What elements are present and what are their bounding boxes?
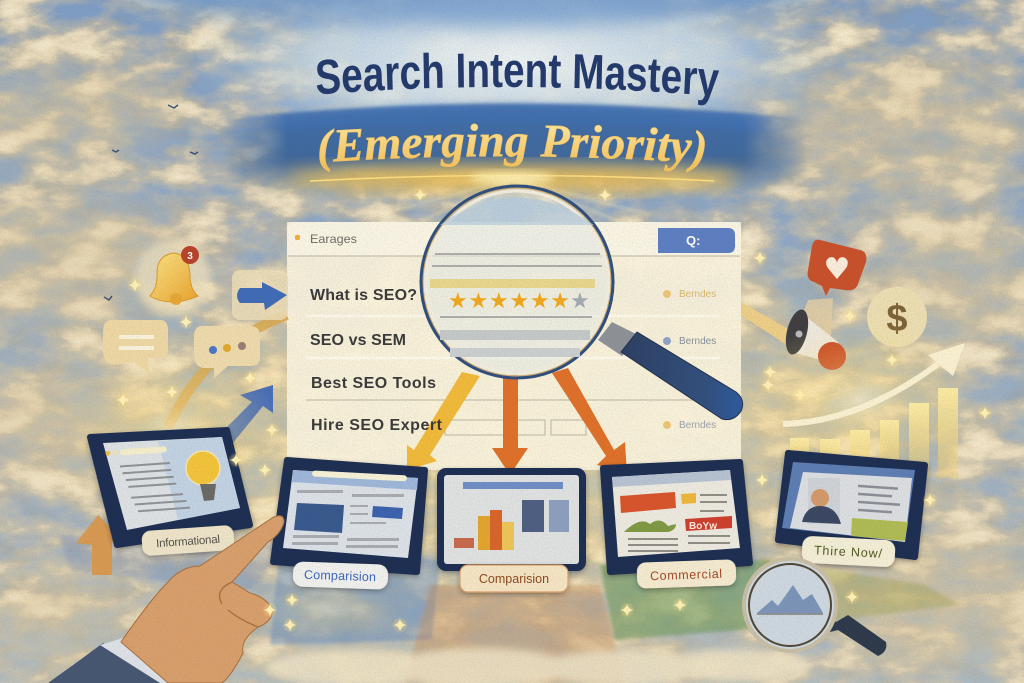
- golden glow: [15, 220, 1015, 640]
- icon: bell: 3: [187, 251, 193, 262]
- icon: dollar coin: [867, 287, 927, 347]
- sleeve: [48, 643, 170, 683]
- sparkle glow areas: [70, 320, 980, 640]
- card: comparison chart: [437, 468, 586, 592]
- search results panel: Earages: [310, 232, 357, 246]
- blue diagonal arrow: [222, 385, 273, 444]
- right row labels: [663, 289, 716, 431]
- panel rules: [288, 256, 740, 435]
- label: hire now: Thire Now/: [814, 543, 883, 561]
- orange up arrow: [76, 515, 122, 575]
- result: best seo tools: Best SEO Tools: [311, 375, 436, 392]
- sky highlight behind title: [185, 0, 845, 157]
- icon: bell: [150, 246, 199, 305]
- label: commercial: Commercial: [650, 567, 722, 583]
- icon: chat bubble: [103, 320, 168, 373]
- search results panel: [287, 222, 741, 470]
- pointing hand: [48, 516, 284, 683]
- right row labels: Berndes: [679, 336, 716, 347]
- beam to megaphone: [741, 302, 790, 345]
- finger crease: [220, 582, 258, 627]
- handle: [598, 322, 743, 420]
- icon: heart bubble: ♥: [824, 252, 850, 287]
- card: comparison chart: Comparision: [479, 572, 549, 586]
- search header bar: [287, 222, 741, 256]
- growth arrow: [783, 364, 938, 424]
- cream patch behind megaphone: [795, 298, 833, 350]
- card: informational: [90, 430, 250, 556]
- card: hire now: [778, 453, 925, 567]
- label: hire now: [801, 536, 896, 567]
- result: hire seo expert: Hire SEO Expert: [311, 417, 443, 434]
- lens lines: [430, 254, 602, 357]
- lens sky tint: [440, 198, 594, 225]
- arrow: orange right: [552, 368, 627, 473]
- hand: [121, 516, 284, 683]
- top sky strip: [120, 0, 820, 26]
- header label: [295, 235, 300, 240]
- row dividers: [306, 316, 720, 358]
- label: comparision orange: [460, 565, 568, 592]
- label: comparision blue: Comparision: [304, 568, 376, 584]
- result: seo vs sem: SEO vs SEM: [310, 332, 406, 349]
- result: what is seo: What is SEO?: [310, 287, 417, 304]
- label: comparision blue: [293, 561, 388, 590]
- search results panel: Q:: [686, 233, 700, 248]
- sparkles: [115, 187, 993, 633]
- icon: blue arrow: [237, 282, 287, 310]
- card: commercial: BoYw: [689, 521, 717, 532]
- arrow: orange centre: [492, 375, 528, 475]
- icon: dollar coin: $: [886, 298, 908, 340]
- right row labels: Berndes: [679, 420, 716, 431]
- growth chart: [783, 343, 965, 478]
- label: informational: Informational: [156, 534, 220, 550]
- arrow: yellow: [407, 372, 480, 470]
- star rating: ★★★★★★: [448, 289, 570, 314]
- icon: heart bubble: [808, 240, 866, 296]
- result rows: [310, 287, 443, 434]
- curved path arrow: [168, 315, 287, 428]
- card: comparison blue: [273, 460, 425, 590]
- horizon glow: [282, 165, 742, 191]
- label: commercial: [637, 559, 736, 589]
- cream tile behind blue arrow: [232, 270, 288, 320]
- right row labels: Berndes: [679, 289, 716, 300]
- label: informational: [141, 525, 235, 556]
- icon: megaphone: [782, 307, 846, 370]
- lens: [422, 187, 612, 377]
- magnifying glass: [421, 186, 743, 420]
- card: commercial: [603, 462, 750, 589]
- blue title arc band: [215, 104, 815, 195]
- icon: dots bubble: [194, 326, 260, 378]
- title: Search Intent Mastery: [316, 52, 720, 106]
- subtitle: (Emerging Priority): [319, 124, 705, 172]
- cream glow behind bell: [135, 240, 211, 316]
- light rays: [380, 178, 650, 222]
- small magnifier: [744, 559, 886, 656]
- magnifying glass: ★: [570, 289, 590, 314]
- search button: [658, 228, 735, 253]
- bottom cloud bank: [265, 648, 810, 683]
- birds: [104, 105, 198, 300]
- ground: coloured planes: [60, 535, 960, 683]
